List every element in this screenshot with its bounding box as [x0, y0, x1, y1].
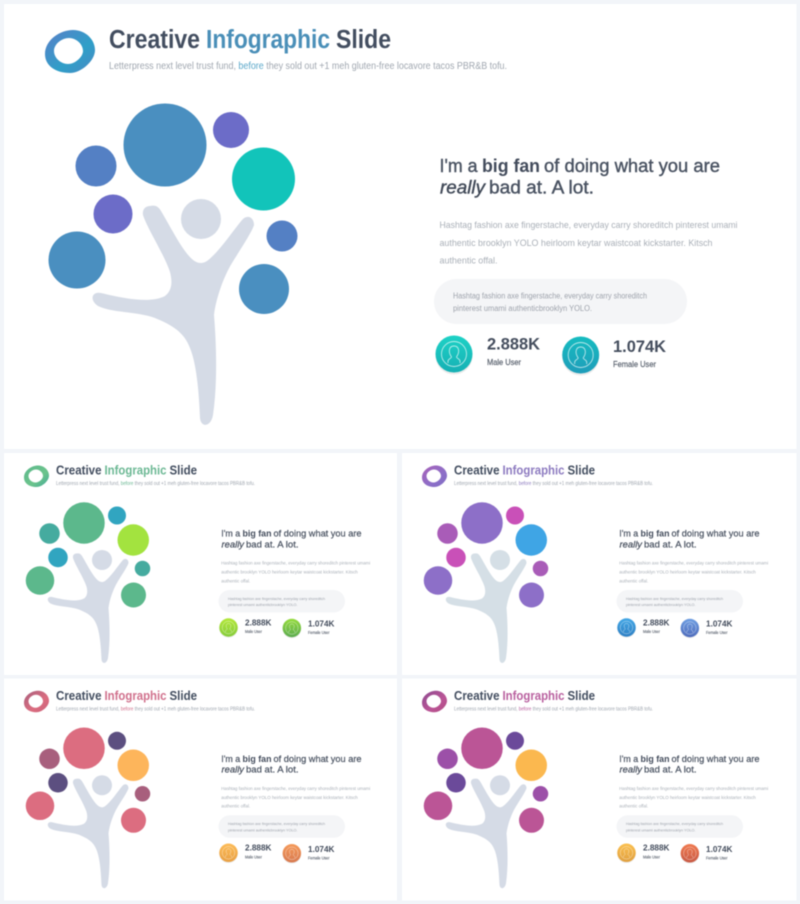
callout pill: pinterest umami authenticbrooklyn YOLO.: [626, 602, 696, 607]
icon: female user badge: [681, 844, 699, 864]
title: Infographic: [104, 688, 166, 703]
stat: female user: [562, 336, 667, 376]
callout pill: Hashtag fashion axe fingerstache, everyday carry shoreditch: [626, 596, 723, 601]
callout pill: pinterest umami authenticbrooklyn YOLO.: [228, 827, 298, 832]
figure head: [92, 550, 112, 570]
heading: really: [620, 765, 643, 775]
slide: purple version: [402, 453, 796, 675]
stat: male user: Male User: [245, 854, 263, 859]
icon: female user badge: [283, 619, 301, 638]
heading: of doing what you are: [672, 528, 760, 538]
callout pill: [218, 815, 345, 838]
heading: really: [222, 539, 245, 549]
tree figure: [48, 779, 129, 888]
title: Creative: [454, 462, 500, 478]
stat: male user: [219, 617, 272, 638]
heading: of doing what you are: [672, 754, 760, 764]
body paragraph: authentic brooklyn YOLO heirloom keytar waistcoat kickstarter. Kitsch: [221, 570, 358, 576]
heading: bad at. A lot.: [489, 178, 594, 198]
title: Infographic: [502, 688, 564, 703]
heading: I'm a: [221, 528, 240, 538]
panel: main slide background: [4, 4, 796, 449]
title: Slide: [568, 462, 595, 478]
leaf circles: [26, 728, 150, 833]
subtitle: Letterpress next level trust fund, before they sold out +1 meh gluten-free locavore tacos PBR&B tofu.: [56, 706, 255, 712]
body paragraph: Hashtag fashion axe fingerstache, everyday carry shoreditch pinterest umami: [619, 560, 768, 566]
subtitle: Letterpress next level trust fund, before they sold out +1 meh gluten-free locavore tacos PBR&B tofu.: [454, 481, 653, 487]
tree figure: [446, 779, 526, 888]
heading: really: [222, 765, 245, 775]
figure head: [92, 775, 112, 795]
tree illustration: [424, 502, 548, 663]
heading: bad at. A lot.: [246, 765, 298, 775]
title: Slide: [170, 462, 197, 478]
body paragraph: authentic offal.: [221, 804, 250, 810]
slide content: main: [45, 26, 738, 425]
stat: female user: 1.074K: [613, 337, 667, 356]
icon: female user badge: [283, 844, 301, 864]
heading: really: [440, 178, 486, 198]
icon: male user badge: [436, 336, 472, 374]
body paragraph: Hashtag fashion axe fingerstache, everyday carry shoreditch pinterest umami: [221, 786, 370, 792]
stat: female user: 1.074K: [706, 844, 733, 854]
slide content: magenta: [422, 688, 768, 888]
title: Infographic: [502, 462, 564, 478]
stat: male user: [617, 843, 670, 863]
icon: male user badge: [219, 844, 238, 863]
panel: green slide background: [4, 453, 397, 675]
body paragraph: authentic brooklyn YOLO heirloom keytar waistcoat kickstarter. Kitsch: [619, 570, 756, 576]
panel: magenta slide background: [402, 678, 796, 900]
tree figure: [446, 553, 526, 663]
leaf circles: [48, 104, 298, 314]
panel: red slide background: [4, 678, 397, 900]
body paragraph: authentic offal.: [440, 256, 498, 266]
heading: big fan: [640, 528, 670, 538]
callout pill: [616, 590, 743, 612]
stat: male user: 2.888K: [245, 617, 272, 627]
stat: female user: Female User: [706, 630, 728, 635]
body paragraph: Hashtag fashion axe fingerstache, everyday carry shoreditch pinterest umami: [221, 560, 370, 566]
heading: big fan: [242, 754, 272, 764]
stat: female user: 1.074K: [706, 618, 733, 628]
icon: female user badge: [562, 336, 599, 376]
figure head: [490, 550, 510, 570]
slide: main blue-teal version: [4, 4, 796, 449]
body paragraph: authentic brooklyn YOLO heirloom keytar waistcoat kickstarter. Kitsch: [440, 238, 712, 249]
heading: bad at. A lot.: [246, 539, 298, 549]
callout pill: Hashtag fashion axe fingerstache, everyday carry shoreditch: [626, 821, 723, 826]
slide content: purple: [422, 462, 768, 663]
title: Creative: [109, 26, 200, 54]
stat: female user: [681, 844, 733, 864]
stat: male user: 2.888K: [643, 843, 670, 853]
title: Infographic: [104, 462, 166, 478]
heading: of doing what you are: [274, 754, 362, 764]
icon: ring logo: [422, 466, 447, 487]
callout pill: pinterest umami authenticbrooklyn YOLO.: [626, 827, 696, 832]
body paragraph: authentic offal.: [619, 804, 648, 810]
heading: I'm a: [619, 754, 638, 764]
stat: female user: 1.074K: [308, 618, 335, 628]
icon: male user badge: [219, 618, 238, 638]
subtitle: Letterpress next level trust fund, before they sold out +1 meh gluten-free locavore tacos PBR&B tofu.: [56, 481, 255, 487]
heading: bad at. A lot.: [644, 765, 696, 775]
callout pill: pinterest umami authenticbrooklyn YOLO.: [453, 304, 592, 313]
heading: I'm a: [221, 754, 240, 764]
tree illustration: [48, 104, 298, 425]
stat: male user: Male User: [245, 629, 263, 634]
heading: big fan: [242, 528, 272, 538]
slide: red version: [4, 678, 397, 900]
heading: really: [620, 539, 643, 549]
slide: magenta version: [402, 678, 796, 900]
subtitle: Letterpress next level trust fund, before they sold out +1 meh gluten-free locavore tacos PBR&B tofu.: [109, 61, 507, 72]
body paragraph: authentic brooklyn YOLO heirloom keytar waistcoat kickstarter. Kitsch: [221, 795, 358, 801]
icon: ring logo: [422, 691, 447, 712]
heading: of doing what you are: [544, 156, 720, 176]
stat: male user: [219, 843, 272, 863]
stat: male user: Male User: [487, 357, 521, 367]
tree figure: [93, 206, 254, 425]
title: Slide: [568, 688, 595, 703]
stat: male user: Male User: [643, 629, 661, 634]
stat: female user: Female User: [706, 855, 728, 860]
heading: of doing what you are: [274, 528, 362, 538]
icon: ring logo: [45, 30, 95, 73]
stat: female user: 1.074K: [308, 844, 335, 854]
stat: male user: [617, 617, 670, 638]
title: Infographic: [206, 26, 330, 54]
figure head: [490, 775, 510, 795]
heading: bad at. A lot.: [644, 539, 696, 549]
subtitle: Letterpress next level trust fund, before they sold out +1 meh gluten-free locavore tacos PBR&B tofu.: [454, 706, 653, 712]
body paragraph: authentic offal.: [619, 578, 648, 584]
body paragraph: Hashtag fashion axe fingerstache, everyday carry shoreditch pinterest umami: [619, 786, 768, 792]
figure head: [181, 199, 221, 239]
tree illustration: [424, 728, 548, 888]
stat: male user: 2.888K: [245, 843, 272, 853]
icon: male user badge: [617, 844, 636, 863]
icon: ring logo: [24, 466, 49, 487]
stat: male user: Male User: [643, 854, 661, 859]
callout pill: Hashtag fashion axe fingerstache, everyday carry shoreditch: [228, 821, 325, 826]
panel: purple slide background: [402, 453, 796, 675]
stat: male user: 2.888K: [487, 334, 541, 354]
callout pill: [218, 590, 345, 612]
stat: male user: 2.888K: [643, 617, 670, 627]
callout pill: Hashtag fashion axe fingerstache, everyday carry shoreditch: [228, 596, 325, 601]
title: Creative: [56, 462, 102, 478]
callout pill: [616, 815, 743, 838]
heading: big fan: [640, 754, 670, 764]
callout pill: Hashtag fashion axe fingerstache, everyday carry shoreditch: [453, 292, 647, 300]
icon: female user badge: [681, 619, 699, 638]
slide content: red: [24, 688, 370, 888]
stat: female user: Female User: [308, 630, 330, 635]
stat: female user: Female User: [613, 359, 656, 369]
icon: ring logo: [24, 691, 49, 712]
body paragraph: authentic brooklyn YOLO heirloom keytar waistcoat kickstarter. Kitsch: [619, 795, 756, 801]
tree illustration: [26, 728, 150, 888]
title: Creative: [56, 688, 102, 703]
title: Slide: [336, 26, 391, 54]
slide: green version: [4, 453, 397, 675]
tree figure: [48, 553, 129, 663]
callout pill: [434, 279, 687, 324]
heading: I'm a: [440, 156, 478, 176]
heading: I'm a: [619, 528, 638, 538]
stat: female user: [283, 618, 335, 638]
leaf circles: [424, 728, 548, 833]
stat: female user: Female User: [308, 855, 330, 860]
title: Slide: [170, 688, 197, 703]
icon: male user badge: [617, 618, 636, 638]
slide content: green: [24, 462, 370, 663]
stat: female user: [283, 844, 335, 864]
leaf circles: [424, 502, 548, 608]
title: Creative: [454, 688, 500, 703]
stat: male user: [436, 334, 541, 374]
callout pill: pinterest umami authenticbrooklyn YOLO.: [228, 602, 298, 607]
heading: big fan: [482, 156, 540, 176]
stat: female user: [681, 618, 733, 638]
body paragraph: Hashtag fashion axe fingerstache, everyday carry shoreditch pinterest umami: [440, 220, 738, 231]
leaf circles: [26, 502, 150, 608]
tree illustration: [26, 502, 150, 663]
body paragraph: authentic offal.: [221, 578, 250, 584]
